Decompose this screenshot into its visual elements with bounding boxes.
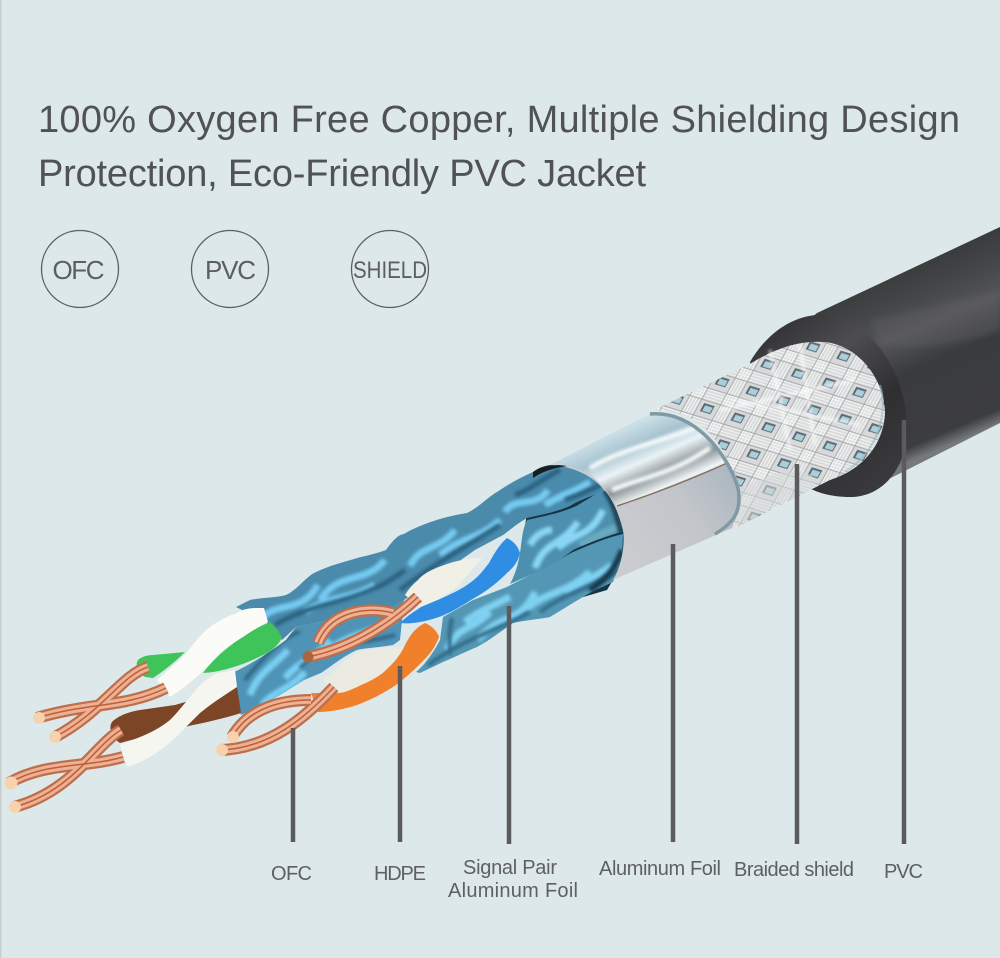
title: 100% Oxygen Free Copper, Multiple Shielding Design (38, 99, 960, 141)
insulation: white (157, 608, 268, 697)
title (38, 99, 960, 195)
foil opening shadow (520, 464, 626, 600)
feature badges (42, 230, 428, 308)
label: OFC: OFC (271, 863, 312, 885)
badge: OFC (42, 230, 118, 308)
ribbon: upper (236, 466, 604, 640)
label: Signal Pair Aluminum Foil (448, 857, 578, 902)
leader lines (293, 420, 904, 844)
ribbon: middle (510, 490, 624, 584)
ribbon: lower left (235, 600, 404, 715)
title: Protection, Eco-Friendly PVC Jacket (38, 153, 646, 195)
insulation: brown (110, 687, 241, 743)
signal pair aluminum foil ribbons (235, 466, 624, 715)
label: Signal Pair Aluminum Foil: Signal Pair (463, 857, 557, 879)
insulation: orange (311, 623, 439, 712)
wire pair: brown (110, 670, 241, 767)
badge: PVC (192, 230, 268, 308)
insulation: white (405, 558, 482, 607)
wire pair: green (137, 608, 282, 697)
wire pair: orange (311, 623, 439, 712)
wire pair: blue (400, 538, 520, 623)
insulation: green (137, 622, 282, 678)
copper conductors (9, 597, 418, 807)
badge: OFC: OFC (52, 255, 104, 285)
badge: SHIELD: SHIELD (353, 257, 427, 284)
label: Aluminum Foil: Aluminum Foil (599, 858, 721, 880)
insulation: white (120, 670, 237, 767)
insulation: blue (400, 538, 520, 623)
conductor tips (4, 652, 314, 813)
cable illustration (4, 227, 1000, 813)
badge: SHIELD (352, 230, 428, 308)
label: PVC: PVC (884, 861, 923, 883)
jacket end ring (750, 315, 907, 497)
ribbon: lower right (416, 534, 623, 673)
label: HDPE: HDPE (374, 863, 426, 885)
label: Braided shield: Braided shield (734, 859, 854, 881)
braided shield (650, 342, 885, 529)
label: Signal Pair Aluminum Foil: Aluminum Foil (448, 880, 578, 902)
component labels (271, 857, 923, 902)
PVC jacket (750, 227, 1000, 497)
insulation: white (323, 647, 404, 693)
aluminum foil (533, 414, 740, 580)
badge: PVC: PVC (205, 255, 256, 285)
